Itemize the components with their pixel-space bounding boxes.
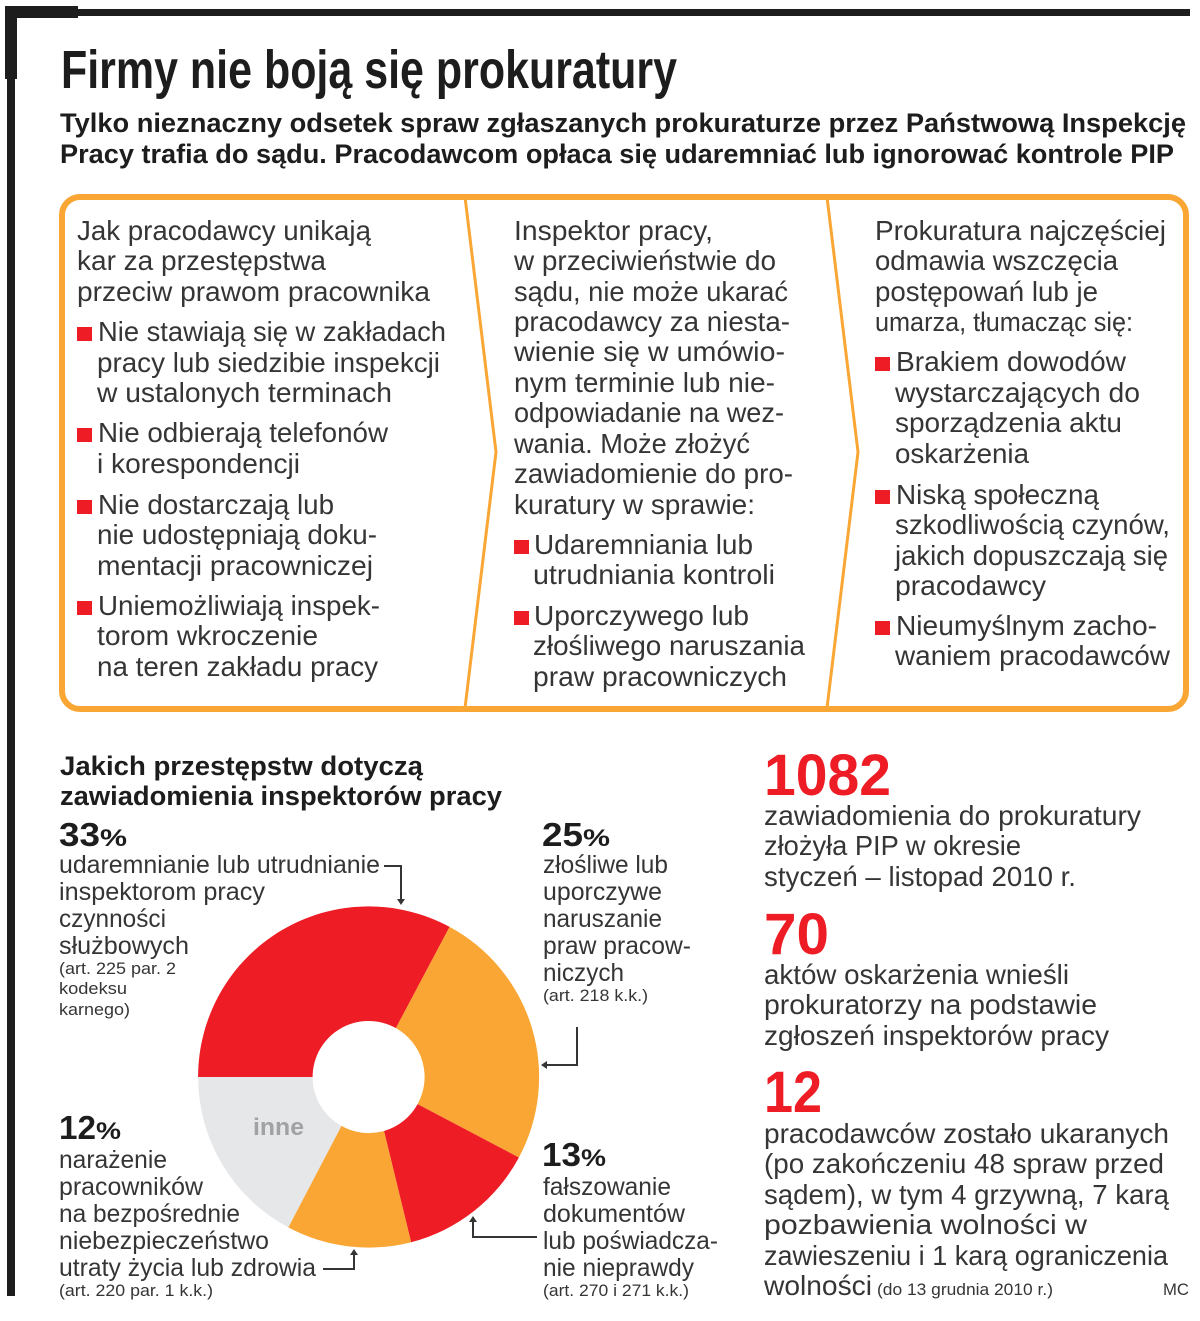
stat: 12 employers punished: pracodawców zostało ukaranych <box>764 1118 1169 1149</box>
stat: 1082 notifications: 1082 <box>764 743 891 808</box>
column 2: what the inspector can do <box>513 215 805 692</box>
stat: 12 employers punished: pozbawienia wolności w <box>764 1209 1088 1240</box>
column 2: what the inspector can do: praw pracowniczych <box>533 661 787 692</box>
column 2: what the inspector can do: wania. Może złożyć <box>513 428 750 459</box>
column 3: why prosecutors refuse: sporządzenia aktu <box>895 407 1122 438</box>
label: inne: inne <box>253 1114 304 1141</box>
column 3: why prosecutors refuse: waniem pracodawców <box>894 640 1171 671</box>
credit: MC <box>1163 1280 1189 1299</box>
callout: 33%: 33 <box>59 816 100 853</box>
column 2: what the inspector can do: odpowiadanie na wez- <box>514 397 784 428</box>
column 2: what the inspector can do: w przeciwieństwie do <box>513 245 776 276</box>
arrow: 12% to orange segment <box>323 1249 358 1269</box>
column 3: why prosecutors refuse: Prokuratura najczęściej <box>875 215 1166 246</box>
column 3: why prosecutors refuse <box>875 215 1171 671</box>
column 1: how employers avoid penalties <box>77 215 446 682</box>
column 3: why prosecutors refuse: pracodawcy <box>895 570 1046 601</box>
stat: 70 indictments <box>764 902 1109 1051</box>
callout: 33%: czynności <box>59 905 166 933</box>
arrow: 13% to red segment <box>469 1216 537 1237</box>
column 2: what the inspector can do: nym terminie lub nie- <box>514 367 775 398</box>
subtitle: Tylko nieznaczny odsetek spraw zgłaszanych prokuraturze przez Państwową Inspekcję <box>60 108 1186 138</box>
column 3: why prosecutors refuse: Nieumyślnym zacho- <box>896 610 1157 641</box>
column 2: what the inspector can do: złośliwego naruszania <box>533 630 805 661</box>
column 1: how employers avoid penalties: Nie odbierają telefonów <box>98 417 389 448</box>
column 3: why prosecutors refuse: jakich dopuszczają się <box>894 540 1168 571</box>
callout: 25%: (art. 218 k.k.) <box>543 986 648 1005</box>
column 1: how employers avoid penalties: w ustalonych terminach <box>96 377 392 408</box>
callout: 13%: nie nieprawdy <box>543 1254 694 1282</box>
donut chart <box>198 906 539 1248</box>
column 3: why prosecutors refuse: Niską społeczną <box>896 479 1099 510</box>
callout: 13%: fałszowanie <box>543 1173 671 1201</box>
callout: 12%: pracowników <box>59 1173 204 1201</box>
callout: 12%: 12 <box>59 1109 96 1146</box>
stat: 1082 notifications: styczeń – listopad 2010 r. <box>764 861 1076 892</box>
subtitle <box>60 108 1186 169</box>
stat: 12 employers punished: wolności <box>763 1270 872 1301</box>
stat: 12 employers punished <box>763 1060 1169 1301</box>
callout: 13%: (art. 270 i 271 k.k.) <box>543 1281 689 1300</box>
column 1: how employers avoid penalties: nie udostępniają doku- <box>97 519 377 550</box>
callout: 25%: naruszanie <box>543 905 662 933</box>
column 3: why prosecutors refuse: umarza, tłumacząc się: <box>875 307 1133 337</box>
callout: 12%: (art. 220 par. 1 k.k.) <box>59 1281 213 1300</box>
column 2: what the inspector can do: wienie się w umówio- <box>513 336 785 367</box>
callout: 12%: % <box>96 1118 121 1145</box>
callout: 33%: udaremnianie lub utrudnianie <box>59 851 380 879</box>
column 1: how employers avoid penalties: i korespondencji <box>97 448 300 479</box>
callout: 25% <box>542 816 691 1005</box>
callout: 33%: inspektorom pracy <box>59 878 266 906</box>
column 1: how employers avoid penalties: Uniemożliwiają inspek- <box>98 590 380 621</box>
column 3: why prosecutors refuse: odmawia wszczęcia <box>875 245 1118 276</box>
column 3: why prosecutors refuse: postępowań lub je <box>875 276 1098 307</box>
callout: 25%: niczych <box>543 959 624 987</box>
callout: 12%: niebezpieczeństwo <box>59 1227 269 1255</box>
column 2: what the inspector can do: utrudniania kontroli <box>533 559 775 590</box>
column 2: what the inspector can do: Uporczywego lub <box>534 600 749 631</box>
stat: 12 employers punished: zawieszeniu i 1 karą ograniczenia <box>764 1240 1168 1271</box>
stat: 1082 notifications <box>764 743 1141 892</box>
column 3: why prosecutors refuse: Brakiem dowodów <box>896 346 1127 377</box>
chart heading: Jakich przestępstw dotyczą <box>60 751 424 781</box>
column 3: why prosecutors refuse: wystarczających do <box>894 377 1140 408</box>
column 1: how employers avoid penalties: Jak pracodawcy unikają <box>77 215 371 246</box>
stat: 70 indictments: zgłoszeń inspektorów pracy <box>764 1020 1109 1051</box>
column 2: what the inspector can do: Inspektor pracy, <box>514 215 713 246</box>
column 1: how employers avoid penalties: Nie stawiają się w zakładach <box>98 316 446 347</box>
stat: 70 indictments: prokuratorzy na podstawie <box>764 989 1097 1020</box>
column 1: how employers avoid penalties: torom wkroczenie <box>97 620 318 651</box>
arrow: 25% to orange segment <box>541 1027 577 1069</box>
stat: 70 indictments: 70 <box>764 902 829 967</box>
column 1: how employers avoid penalties: Nie dostarczają lub <box>98 489 334 520</box>
arrow: 33% to red segment <box>384 866 405 905</box>
stat: 12 employers punished: (do 13 grudnia 2010 r.) <box>877 1280 1053 1299</box>
title: Firmy nie boją się prokuratury <box>61 40 677 100</box>
stat: 1082 notifications: zawiadomienia do prokuratury <box>764 800 1141 831</box>
callout: 33%: (art. 225 par. 2 <box>59 959 176 978</box>
callout: 25%: praw pracow- <box>543 932 691 960</box>
column 2: what the inspector can do: kuratury w sprawie: <box>514 489 755 520</box>
column 1: how employers avoid penalties: przeciw prawom pracownika <box>77 276 430 307</box>
callout: 13% <box>542 1136 718 1300</box>
callout: 33% <box>59 816 380 1019</box>
callout: 33%: służbowych <box>59 932 189 960</box>
stat: 12 employers punished: sądem), w tym 4 grzywną, 7 karą <box>764 1179 1169 1210</box>
chart heading: zawiadomienia inspektorów pracy <box>60 781 502 811</box>
callout: 12% <box>59 1109 316 1300</box>
column 1: how employers avoid penalties: mentacji pracowniczej <box>97 550 373 581</box>
column 3: why prosecutors refuse: oskarżenia <box>895 438 1029 469</box>
callout: 25%: uporczywe <box>543 878 662 906</box>
column 3: why prosecutors refuse: szkodliwością czynów, <box>895 509 1170 540</box>
column 1: how employers avoid penalties: kar za przestępstwa <box>77 245 326 276</box>
callout: 25%: złośliwe lub <box>543 851 668 879</box>
column 1: how employers avoid penalties: na teren zakładu pracy <box>97 651 378 682</box>
callout: 33%: kodeksu <box>59 979 127 998</box>
chart heading <box>60 751 502 811</box>
callout: 12%: narażenie <box>59 1146 167 1174</box>
subtitle: Pracy trafia do sądu. Pracodawcom opłaca się udaremniać lub ignorować kontrole PIP <box>60 139 1174 169</box>
callout: 12%: na bezpośrednie <box>59 1200 240 1228</box>
callout: 13%: lub poświadcza- <box>543 1227 718 1255</box>
callout: 33%: karnego) <box>59 1000 130 1019</box>
callout: 13%: % <box>581 1145 606 1172</box>
stat: 12 employers punished: (po zakończeniu 48 spraw przed <box>764 1148 1164 1179</box>
column 2: what the inspector can do: zawiadomienie do pro- <box>514 458 793 489</box>
column 1: how employers avoid penalties: pracy lub siedzibie inspekcji <box>97 347 440 378</box>
stat: 1082 notifications: złożyła PIP w okresie <box>764 830 1021 861</box>
stat: 12 employers punished: 12 <box>764 1060 822 1125</box>
callout: 33%: % <box>100 825 127 852</box>
column 2: what the inspector can do: sądu, nie może ukarać <box>514 276 788 307</box>
panel: three-step explanation box <box>62 197 1186 709</box>
column 2: what the inspector can do: pracodawcy za niesta- <box>514 306 790 337</box>
callout: 25%: 25 <box>542 816 583 853</box>
column 2: what the inspector can do: Udaremniania lub <box>534 529 753 560</box>
callout: 25%: % <box>583 825 610 852</box>
callout: 13%: 13 <box>542 1136 581 1173</box>
callout: 12%: utraty życia lub zdrowia <box>59 1254 316 1282</box>
stat: 70 indictments: aktów oskarżenia wnieśli <box>764 959 1069 990</box>
callout: 13%: dokumentów <box>543 1200 686 1228</box>
